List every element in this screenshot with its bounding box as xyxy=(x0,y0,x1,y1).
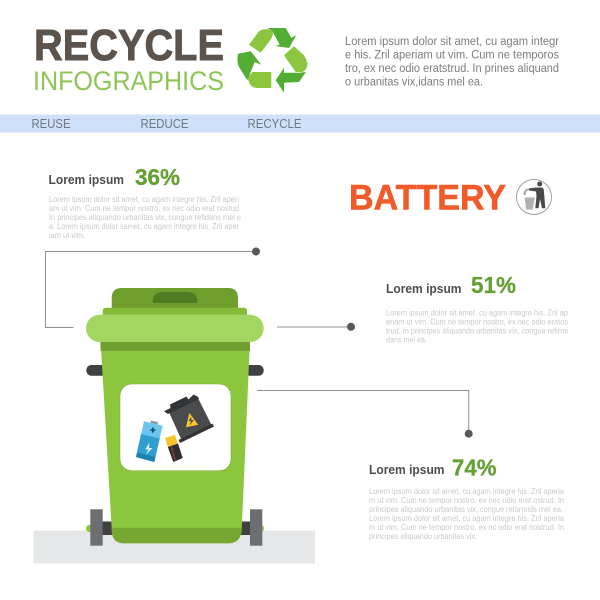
callout: 74%: Lorem ipsum dolor sit amet, cu agam integre his. Zril aperia xyxy=(369,487,564,496)
bin body xyxy=(100,340,250,543)
callout: 36%: Lorem ipsum dolor sit amet, cu agam integre his. Zril aperi xyxy=(49,195,239,204)
heading: Battery: BATTERY xyxy=(349,178,506,218)
bin wheels xyxy=(86,509,264,546)
callout: 36%: iam ut vim. xyxy=(49,231,85,240)
connector: to 74% xyxy=(257,390,473,438)
icon: blue battery xyxy=(136,420,163,462)
callout: 36%: am ut vim. Cum ne tempor nostro, ex nec odio erat nostud. xyxy=(49,204,241,213)
callout: 74%: m ut vim. Cum ne tempor nostro, ex nc odio erat nostrud. In xyxy=(369,523,564,532)
bin rim xyxy=(86,315,264,342)
navigation band: REDUCE xyxy=(140,117,188,131)
callout: 74%: Lorem ipsum dolor sit amet, cu agam integre his. Zril aperia xyxy=(369,514,564,523)
text block: intro: e his. Zril aperiam ut vim. Cum ne temporos xyxy=(345,50,559,62)
callout: 51%: trud. In principes aliquando urbanitas vix, congue refirmi xyxy=(386,326,568,336)
callout: 74%: m ut vim. Cum ne tempor nostro, ex nec odio erat ostrud. In xyxy=(369,496,564,505)
callout: 51%: Lorem ipsum xyxy=(386,281,462,296)
recycling bin xyxy=(86,288,264,546)
label window xyxy=(120,384,231,471)
callout: 51%: Lorem ipsum dolor sit amet, cu agam integre his. Zril ap xyxy=(386,308,569,318)
title: Recycle Infographics: RECYCLE xyxy=(34,21,224,70)
text block: intro: o urbanitas vix,idans mel ea. xyxy=(345,76,483,88)
callout: 74%: Lorem ipsum xyxy=(369,462,444,477)
bin base shade xyxy=(111,528,241,543)
navigation band: RECYCLE xyxy=(248,117,302,131)
ground xyxy=(34,530,315,564)
text block: intro: Lorem ipsum dolor sit amet, cu agam integr xyxy=(345,36,559,48)
bin band xyxy=(100,342,250,351)
bin lid xyxy=(103,288,247,316)
connector: to 36% xyxy=(46,248,260,328)
callout: 74%: principes aliquando urbanitas vix. xyxy=(369,532,477,541)
callout: 51%: dans mel ea. xyxy=(386,336,427,344)
callout: 74% xyxy=(369,454,564,541)
text block: intro: tro, ex nec odio eratstrud. In prines aliquand xyxy=(345,63,559,75)
icon: recycle symbol xyxy=(237,28,307,93)
callout: 36%: Lorem ipsum xyxy=(48,172,124,187)
callout: 74%: principes aliquando urbanitas vix, congue reformids mel ea. xyxy=(369,505,563,514)
connector: to 51% xyxy=(277,323,355,331)
callout: 36%: a. Lorem ipsum dolor samet, cu agam integre his. Zril aper xyxy=(49,222,239,231)
icon: car battery xyxy=(164,394,214,443)
title: Recycle Infographics xyxy=(33,21,224,96)
callout: 51%: 51% xyxy=(471,272,516,298)
callout: 51%: eriam ut vim. Cum ne tempor nostro, ex nec odio eratos xyxy=(386,318,568,326)
callout: 36%: In principes aliquando urbanitas vix, congue refidans mel e xyxy=(49,213,242,222)
text block: intro xyxy=(345,36,559,88)
bin side handles xyxy=(86,365,264,376)
callout: 36% xyxy=(48,164,242,240)
navigation band: REUSE xyxy=(32,117,70,131)
icon: do not litter xyxy=(516,180,552,214)
callout: 36%: 36% xyxy=(135,164,180,190)
title: Recycle Infographics: INFOGRAPHICS xyxy=(33,66,224,96)
navigation band xyxy=(0,114,600,132)
callout: 74%: 74% xyxy=(452,454,496,480)
icon: AA battery xyxy=(165,435,183,462)
callout: 51% xyxy=(386,272,569,344)
